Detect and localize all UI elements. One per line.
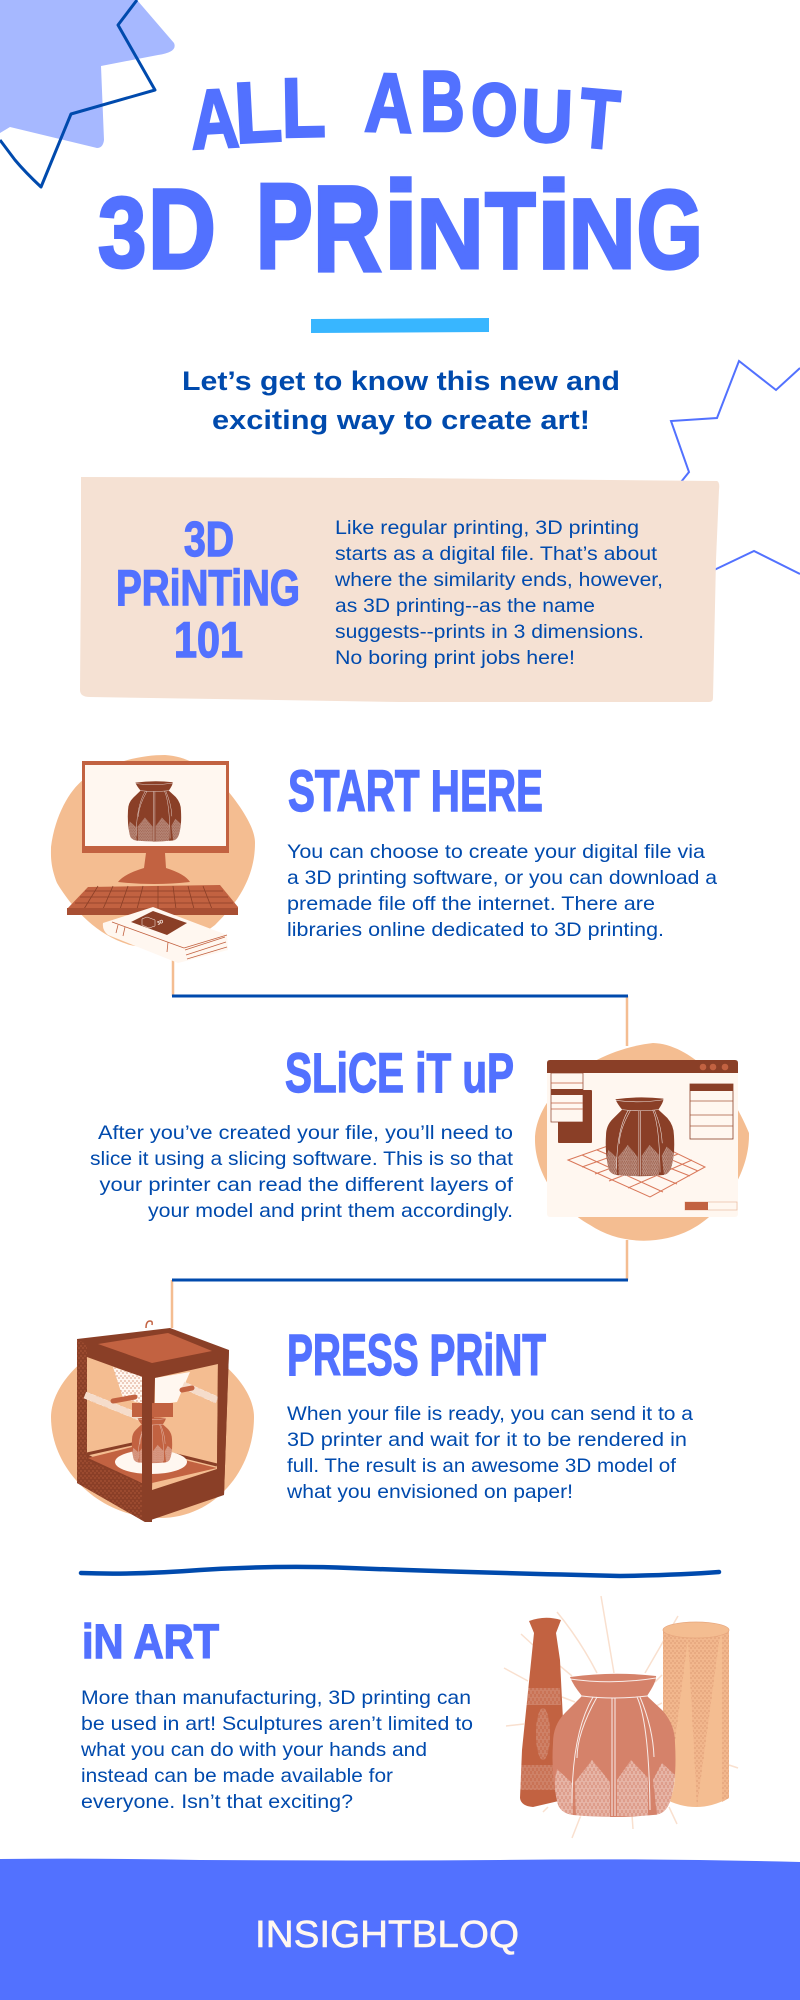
footer brand: INSIGHTBLOQ: [255, 1914, 519, 1956]
heading: start here: START HERE: [288, 759, 543, 824]
title line: 3d printing: [98, 155, 703, 298]
panel heading: [116, 513, 300, 668]
text: start here: libraries online dedicated to 3D printing.: [287, 919, 664, 941]
step: slice it up: [90, 1041, 749, 1241]
title line: 3d printing: i: [536, 155, 572, 294]
panel text: Like regular printing, 3D printing: [335, 517, 639, 539]
text: in art: instead can be made available for: [81, 1765, 394, 1787]
wavy divider: [81, 1567, 719, 1576]
title line: 3d printing: 3: [98, 176, 146, 288]
illustration: computer with book: [51, 755, 255, 963]
title line: all about: U: [519, 73, 574, 159]
title accent bar: [311, 318, 489, 333]
connector lines between steps: [172, 955, 628, 1328]
text: in art: be used in art! Sculptures aren’t limited to: [81, 1713, 473, 1735]
text: start here: You can choose to create your digital file via: [287, 841, 705, 863]
title line: all about: T: [575, 70, 623, 167]
panel text: as 3D printing--as the name: [335, 595, 595, 617]
step: start here: [51, 755, 717, 963]
text: start here: premade file off the internet. There are: [287, 893, 655, 915]
heading: slice it up: SLiCE iT uP: [285, 1041, 514, 1104]
panel: 3d printing 101: [80, 477, 719, 702]
title line: all about: O: [470, 69, 518, 152]
panel heading: PRiNTiNG: [116, 560, 300, 616]
illustration: computer with book: 3D: [156, 919, 165, 927]
illustration: sculptures: [504, 1596, 738, 1838]
subtitle: [182, 366, 620, 435]
text: start here: [287, 841, 717, 941]
subtitle: Let’s get to know this new and: [182, 366, 620, 396]
title line: all about: B: [420, 53, 465, 149]
text: slice it up: After you’ve created your file, you’ll need to: [98, 1122, 513, 1144]
text: in art: what you can do with your hands and: [80, 1739, 427, 1761]
panel background: [80, 477, 719, 702]
section: in art: [80, 1596, 738, 1838]
text: in art: everyone. Isn’t that exciting?: [81, 1791, 353, 1813]
panel text: suggests--prints in 3 dimensions.: [335, 621, 644, 643]
text: in art: [80, 1687, 473, 1813]
step: press print: [51, 1321, 693, 1522]
title line: all about: A: [188, 71, 241, 168]
illustration: slicing software window: [535, 1043, 749, 1241]
title line: 3d printing: D: [148, 167, 216, 293]
text: slice it up: your printer can read the different layers of: [100, 1174, 514, 1196]
text: slice it up: [90, 1122, 514, 1222]
title line: 3d printing: T: [485, 169, 536, 292]
title line: 3d printing: G: [637, 168, 703, 292]
panel text: starts as a digital file. That’s about: [335, 543, 658, 565]
title line: 3d printing: P: [256, 159, 313, 295]
text: slice it up: slice it using a slicing software. This is so that: [90, 1148, 514, 1170]
subtitle: exciting way to create art!: [212, 405, 590, 435]
decorative squiggle: right side: [671, 361, 800, 574]
round vase: [552, 1674, 676, 1817]
tall vase: [520, 1618, 563, 1807]
text: slice it up: your model and print them accordingly.: [148, 1200, 513, 1222]
heading: press print: PRESS PRiNT: [287, 1323, 546, 1388]
title line: 3d printing: R: [313, 162, 382, 298]
text: in art: More than manufacturing, 3D printing can: [81, 1687, 471, 1709]
panel text: [334, 517, 663, 669]
panel text: No boring print jobs here!: [335, 647, 575, 669]
text: press print: 3D printer and wait for it to be rendered in: [287, 1429, 687, 1451]
title: [98, 53, 703, 298]
title line: 3d printing: N: [416, 179, 484, 290]
footer band: [0, 1859, 800, 2000]
title line: all about: L: [281, 60, 326, 155]
illustration: 3d printer: [51, 1321, 254, 1522]
decorative star: top left: [0, 0, 175, 187]
text: press print: what you envisioned on paper!: [286, 1481, 573, 1503]
title line: all about: L: [232, 64, 284, 162]
panel text: where the similarity ends, however,: [334, 569, 663, 591]
title line: 3d printing: i: [383, 155, 419, 294]
title line: 3d printing: N: [568, 179, 636, 290]
cylinder: [663, 1622, 729, 1807]
text: press print: [286, 1403, 693, 1503]
panel heading: 3D: [184, 513, 234, 567]
text: press print: When your file is ready, you can send it to a: [287, 1403, 693, 1425]
title line: all about: [188, 53, 623, 168]
text: press print: full. The result is an awesome 3D model of: [287, 1455, 677, 1477]
title line: all about: A: [363, 56, 415, 151]
heading: in art: iN ART: [82, 1616, 219, 1669]
panel heading: 101: [174, 612, 243, 668]
text: start here: a 3D printing software, or you can download a: [287, 867, 717, 889]
